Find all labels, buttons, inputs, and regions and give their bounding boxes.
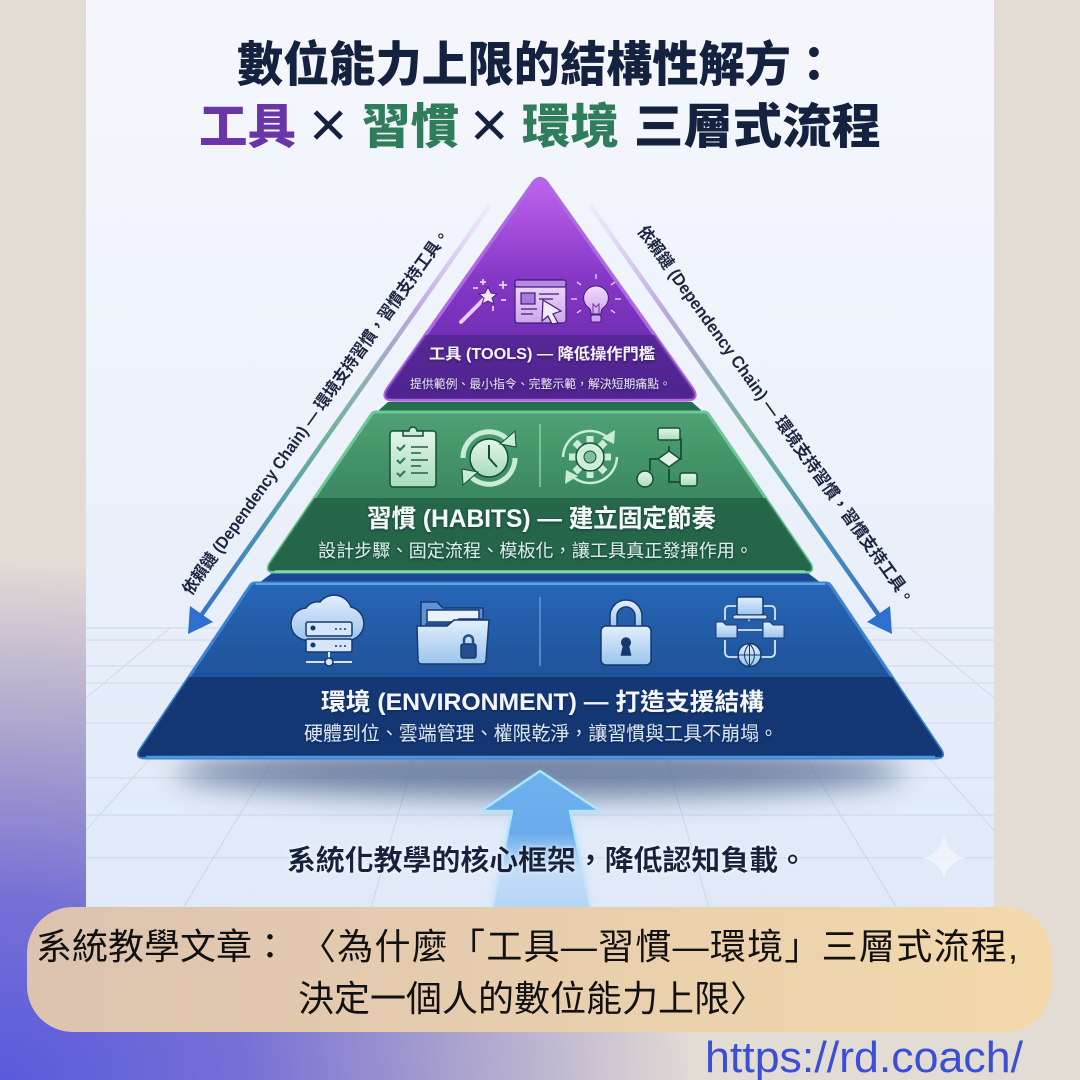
title: 習慣: [362, 101, 459, 154]
icon: checklist clipboard: [390, 427, 436, 487]
panel: infographic card: [86, 0, 994, 908]
text: habits description: 設計步驟、固定流程、模板化，讓工具真正發揮作用。: [318, 541, 753, 561]
title: ×: [309, 87, 348, 161]
label: right dependency chain: 依賴鏈 (Dependency Chain) — 環境支持習慣，習慣支持工具。: [634, 222, 920, 609]
heading: habits: 習慣 (HABITS) — 建立固定節奏: [367, 505, 716, 533]
panel: habits tier: [260, 402, 820, 572]
icon: browser window: [515, 280, 566, 324]
panel: environment tier: [130, 573, 950, 758]
arrow: right dependency chain: [590, 205, 892, 634]
icon: network: [716, 597, 784, 666]
text: tools description: 提供範例、最小指令、完整示範，解決短期痛點。: [410, 376, 671, 391]
icon: padlock: [601, 600, 651, 665]
pyramid shadow: [175, 746, 905, 798]
callout: article title pill: 〈為什麼「工具—習慣—環境」三層式流程,: [300, 926, 1018, 967]
callout: article title pill: [27, 907, 1051, 1032]
icon: locked folder: [417, 602, 489, 664]
text: core framework caption: 系統化教學的核心框架，降低認知負載。: [287, 845, 807, 877]
title: [199, 38, 881, 161]
title: 數位能力上限的結構性解方：: [237, 38, 837, 92]
icon: clock cycle: [462, 431, 516, 485]
divider: [539, 597, 541, 666]
divider: [539, 424, 541, 487]
icon: flowchart: [637, 428, 697, 487]
arrow: left dependency chain: [188, 205, 490, 634]
arrow: upward core arrow: [481, 771, 600, 908]
title: 環境: [522, 101, 619, 154]
title: 工具: [199, 101, 296, 154]
heading: environment: 環境 (ENVIRONMENT) — 打造支援結構: [321, 689, 764, 716]
title: ×: [470, 87, 509, 161]
label: left dependency chain: 依賴鏈 (Dependency Chain) — 環境支持習慣，習慣支持工具。: [178, 224, 454, 598]
icon: cloud server: [291, 595, 364, 666]
text: environment description: 硬體到位、雲端管理、權限乾淨，讓習慣與工具不崩塌。: [304, 723, 778, 745]
callout: article title pill: 決定一個人的數位能力上限〉: [298, 978, 766, 1019]
title: 三層式流程: [634, 101, 881, 154]
icon: magic wand: [461, 279, 507, 322]
panel: tools tier: [380, 178, 700, 400]
callout: article title pill: 系統教學文章：: [36, 926, 288, 967]
icon: gear cycle: [563, 430, 617, 484]
icon: light bulb: [571, 274, 621, 322]
heading: tools: 工具 (TOOLS) — 降低操作門檻: [429, 344, 656, 363]
icon: sparkle: [923, 835, 965, 879]
